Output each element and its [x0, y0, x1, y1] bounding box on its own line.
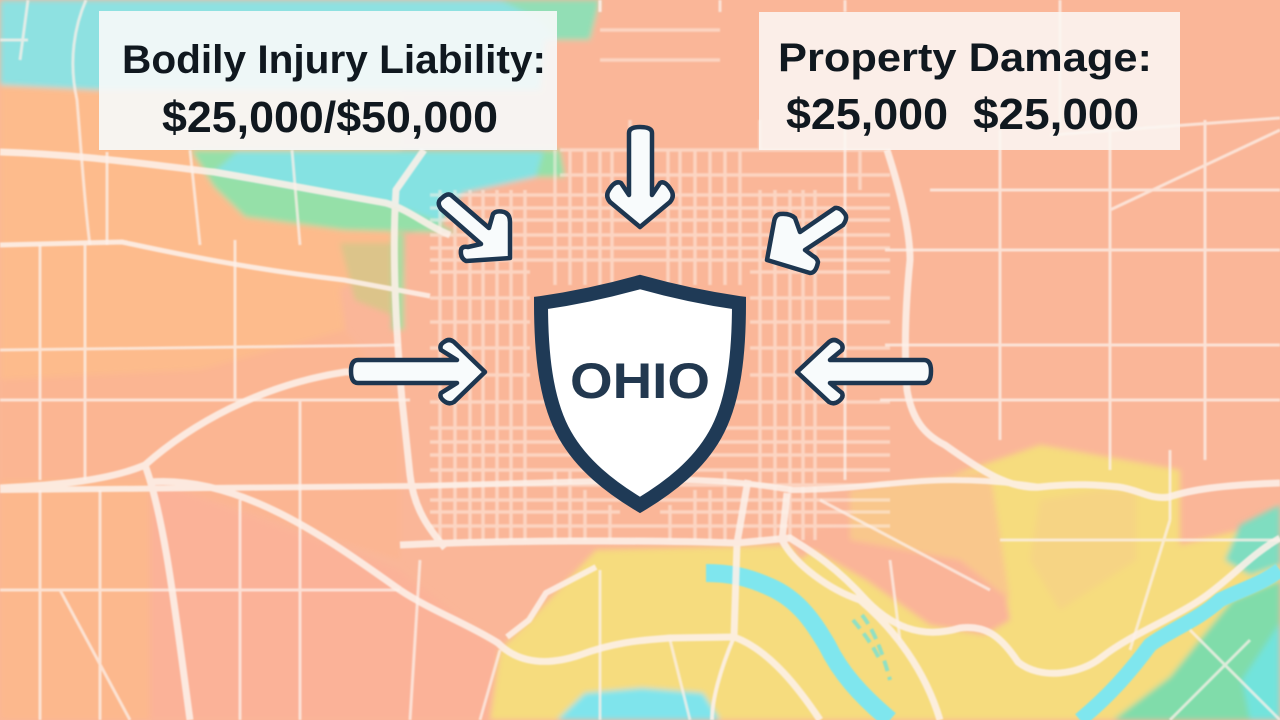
panel: property damage	[759, 12, 1180, 150]
arrow: top	[607, 127, 673, 227]
heading: property damage: Property Damage:	[778, 36, 1152, 80]
arrow: upper left	[439, 194, 510, 261]
river	[706, 570, 1280, 720]
icon: Ohio shield	[541, 282, 739, 505]
panel: bodily injury liability	[99, 11, 557, 150]
amount: property damage right: $25,000	[973, 90, 1139, 139]
amount: property damage left: $25,000	[786, 90, 948, 139]
heading: bodily injury: Bodily Injury Liability:	[122, 38, 546, 82]
amount: bodily injury: $25,000/$50,000	[162, 93, 498, 142]
arrow: left	[351, 340, 485, 403]
arrow: right	[797, 340, 931, 403]
shield label: OHIO	[570, 353, 710, 409]
arrow: upper right	[767, 208, 846, 273]
